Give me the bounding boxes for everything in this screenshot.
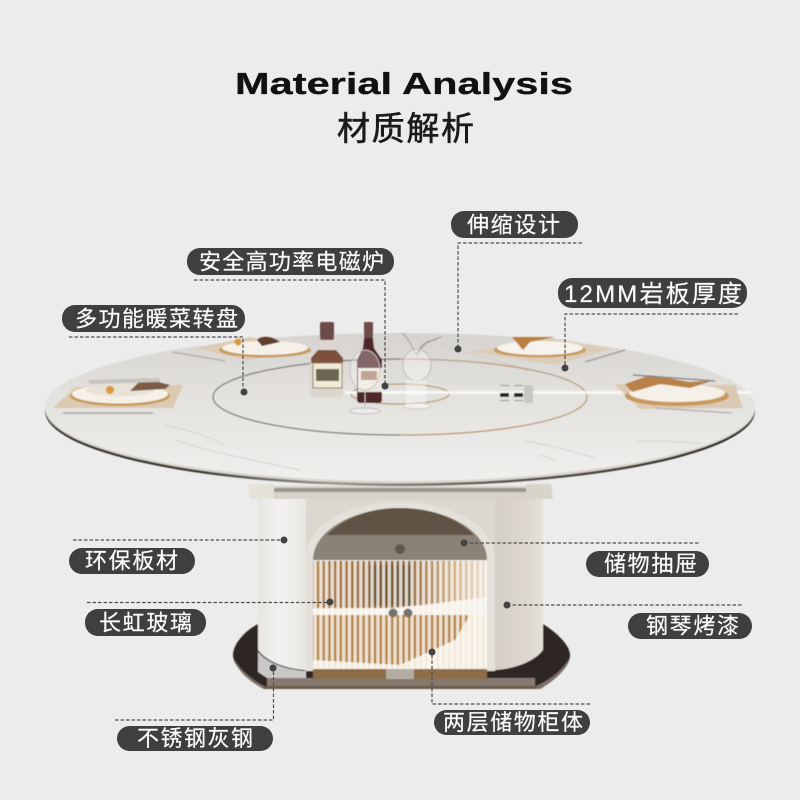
- wine glass: [350, 350, 380, 414]
- place setting back left: [172, 337, 315, 361]
- induction cooker controls: [500, 385, 533, 403]
- callout: eco board: [69, 536, 288, 574]
- table rim: [45, 336, 755, 486]
- stone table top: [45, 333, 755, 481]
- callout: telescopic design: 伸缩设计: [467, 212, 560, 238]
- place setting right: [614, 375, 743, 413]
- stainless steel base plate: [233, 624, 570, 689]
- callout: turntable: [62, 305, 248, 396]
- highlight band: [345, 391, 750, 394]
- callout: ribbed glass: 长虹玻璃: [99, 610, 192, 636]
- callout: induction cooker: 安全高功率电磁炉: [199, 250, 384, 274]
- cabinet right column: [495, 498, 543, 670]
- ribbed glass doors: [313, 561, 487, 679]
- callout: telescopic design: [451, 211, 582, 352]
- lazy susan turntable ring: [213, 359, 587, 435]
- callout: piano lacquer: 钢琴烤漆: [646, 614, 739, 638]
- callout: 12mm slab thickness: 12MM岩板厚度: [564, 281, 742, 308]
- cabinet left column: [258, 498, 306, 670]
- callout: 12mm slab thickness: [558, 278, 747, 372]
- callout: piano lacquer: [504, 602, 752, 639]
- callout: ribbed glass: [85, 598, 334, 636]
- callout: two-layer cabinet: 两层储物柜体: [443, 710, 583, 735]
- vase with branches and glass: [402, 333, 442, 409]
- callout: turntable: 多功能暖菜转盘: [75, 306, 238, 332]
- marble veins: [165, 345, 700, 470]
- cabinet interior upper shelf: [313, 508, 487, 560]
- callout: stainless steel: [115, 664, 276, 751]
- place setting back right: [470, 337, 625, 365]
- callout: storage drawer: 储物抽屉: [604, 552, 697, 576]
- callout: storage drawer: [460, 540, 709, 577]
- callout: two-layer cabinet: [428, 648, 590, 735]
- table illustration: [45, 322, 755, 689]
- whisky bottle: [310, 322, 343, 397]
- callout: induction cooker: [187, 248, 394, 390]
- wine bottle: [357, 322, 382, 403]
- cabinet front panel and arch frame: [305, 498, 495, 671]
- title: Material Analysis: [235, 66, 573, 101]
- callout: eco board: 环保板材: [85, 548, 178, 574]
- subtitle: 材质解析: [337, 110, 474, 147]
- callout: stainless steel: 不锈钢灰钢: [137, 726, 253, 751]
- cabinet top cap: [248, 484, 553, 499]
- drawer knob: [395, 544, 405, 554]
- place setting left: [53, 378, 183, 414]
